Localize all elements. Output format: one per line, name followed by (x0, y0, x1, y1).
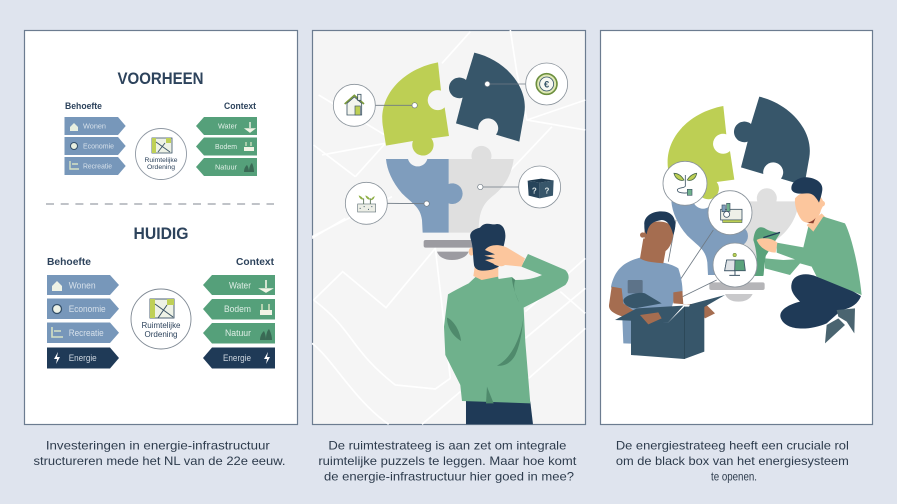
person: hair (644, 211, 675, 235)
arrow: Recreatie huidig: Recreatie (69, 328, 104, 338)
person: shirt (611, 258, 683, 345)
person: hand over box (640, 312, 662, 324)
arrow: Recreatie: Recreatie (83, 162, 112, 170)
icon: black box: ? (545, 186, 550, 195)
arrow: Recreatie (64, 157, 126, 175)
puzzle piece: green (668, 106, 734, 199)
arrow: Wonen (64, 117, 126, 135)
icon: euro (526, 63, 568, 105)
man: neck (807, 213, 827, 233)
puzzle piece: grey (734, 188, 799, 275)
person: head (644, 221, 673, 254)
arrow: Natuur (196, 158, 257, 176)
circle: Ruimtelijke Ordening (voorheen): Ordening (147, 164, 175, 171)
puzzle piece: green (382, 62, 449, 156)
person: neck (640, 238, 667, 263)
circle: Ruimtelijke Ordening (huidig): Ordening (144, 330, 178, 339)
arrow: Recreatie huidig (47, 322, 119, 343)
man: hand (484, 245, 525, 267)
arrow: Water (196, 117, 257, 135)
label: Behoefte: Behoefte (65, 101, 102, 111)
arrow: Natuur huidig: Natuur (225, 328, 251, 338)
caption: panel 3: te openen. (711, 470, 757, 484)
caption: panel 2: De ruimtestrateeg is aan zet om integrale (328, 438, 567, 452)
illustration: puzzle lamp (333, 53, 568, 260)
circle: Ruimtelijke Ordening (voorheen): Ruimtelijke (144, 157, 178, 164)
man sitting (753, 177, 862, 343)
arrow: Economie huidig: Economie (69, 304, 106, 314)
arrow: Natuur: Natuur (215, 162, 237, 172)
man: hand (757, 238, 777, 253)
caption: panel 2: ruimtelijke puzzels te leggen. Maar hoe komt (318, 454, 577, 468)
arrow: Economie (64, 137, 126, 155)
man: jacket shadows (447, 278, 524, 403)
person: pocket (628, 280, 643, 293)
man: pencil (763, 232, 780, 238)
arrow: Water huidig: Water (229, 280, 251, 290)
arrow: Bodem huidig: Bodem (224, 304, 251, 314)
man: head and raised hand (469, 224, 525, 280)
caption: panel 3: De energiestrateeg heeft een cruciale rol (616, 438, 849, 452)
label: Behoefte huidig: Behoefte (47, 256, 91, 268)
lamp base (709, 282, 765, 302)
man: green foliage on lamp (753, 227, 780, 276)
arrow: Economie: Economie (83, 142, 114, 150)
icon: soil and plants (345, 182, 387, 224)
panel: energiestrateeg (600, 30, 872, 424)
icon: factory (708, 191, 752, 235)
caption: panel 3: om de black box van het energiesysteem (616, 454, 849, 468)
arrow: Economie huidig (47, 298, 119, 319)
panel: ruimtestrateeg (312, 30, 586, 424)
man: neck (473, 265, 498, 280)
icon: plant and plug (663, 161, 707, 205)
illustration: puzzle lamp (668, 97, 810, 302)
icon: euro: € (544, 79, 550, 89)
box (615, 293, 725, 359)
arrow: Water huidig (203, 275, 275, 295)
arrow: Bodem huidig (203, 299, 275, 320)
icon: solar panel (713, 243, 757, 287)
man: jacket (444, 254, 569, 403)
circle: Ruimtelijke Ordening (voorheen) (136, 128, 186, 180)
puzzle piece: dark (449, 53, 525, 142)
icons over lamp (663, 161, 757, 287)
person: left arm (609, 287, 662, 324)
panel: voorheen en huidig (24, 30, 298, 424)
heading: HUIDIG: HUIDIG (134, 225, 188, 243)
circle: Ruimtelijke Ordening (huidig): Ruimtelijke (142, 321, 180, 330)
person: right arm (673, 291, 715, 318)
man: hair (791, 177, 822, 203)
label: Context huidig: Context (236, 256, 274, 268)
puzzle piece: grey (449, 146, 514, 233)
man: shirt (765, 217, 862, 295)
circle: Ruimtelijke Ordening (huidig) (131, 289, 191, 349)
puzzle piece: dark (734, 97, 810, 186)
man: hair (470, 224, 505, 271)
label: Context: Context (224, 101, 256, 111)
man: shoes (825, 308, 855, 343)
man: trousers (466, 400, 533, 424)
arrow: Bodem (196, 138, 257, 156)
arrow: Energie huidig: Energie (69, 353, 97, 363)
man: ear (469, 248, 474, 256)
man: face (795, 191, 824, 223)
puzzle piece: blue (386, 159, 463, 233)
person: ear (640, 232, 645, 238)
man: ear (819, 201, 825, 207)
arrow: Energie huidig (47, 348, 119, 368)
arrow: Water: Water (218, 122, 237, 130)
connector lines (375, 84, 525, 204)
caption: panel 2: de energie-infrastructuur hier goed in mee? (324, 470, 574, 484)
caption: panel 1: structureren mede het NL van de 22e eeuw. (34, 454, 286, 468)
arrow: Natuur huidig (203, 323, 275, 344)
heading: VOORHEEN: VOORHEEN (118, 70, 204, 88)
man: trousers (780, 274, 861, 329)
icon: house (333, 84, 375, 126)
arrow: Wonen huidig (47, 275, 119, 295)
arrow: Wonen: Wonen (83, 122, 106, 130)
arrow: Bodem: Bodem (215, 142, 237, 151)
arrow: Energie rechts huidig (203, 348, 275, 368)
puzzle piece: blue (671, 201, 748, 275)
arrow: Energie rechts huidig: Energie (223, 353, 251, 363)
illustration: man scratching head (444, 254, 569, 424)
connector lines (668, 220, 717, 297)
man: mouth (807, 218, 816, 223)
lamp base (424, 240, 477, 260)
caption: panel 1: Investeringen in energie-infrastructuur (46, 438, 270, 452)
arrow: Wonen huidig: Wonen (69, 280, 96, 290)
icon: black box: ? (532, 187, 537, 196)
person with box (609, 211, 725, 359)
icon: black box (519, 166, 561, 208)
